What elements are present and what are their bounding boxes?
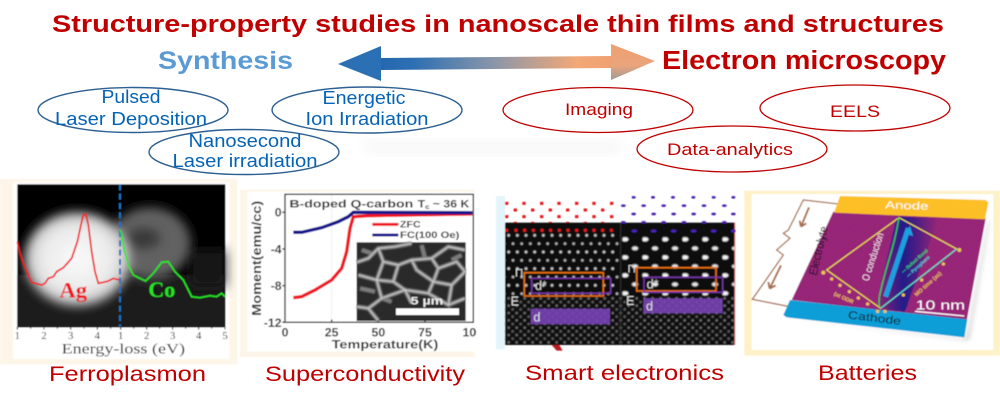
magnetization chart xyxy=(249,194,476,352)
energy axis: 4 xyxy=(95,331,101,342)
chart title: B-doped Q-carbon xyxy=(289,198,414,210)
FC curve xyxy=(293,212,472,232)
ellipse: imaging: Imaging xyxy=(565,101,633,119)
ellipse: EELS: EELS xyxy=(830,103,880,121)
label: Co: Co xyxy=(148,277,175,302)
caption: smart electronics: Smart electronics xyxy=(525,361,724,385)
x axis labels xyxy=(282,325,476,339)
caption: superconductivity: Superconductivity xyxy=(265,362,465,386)
red atom positions xyxy=(505,203,614,223)
energy axis: 1 xyxy=(15,331,20,342)
energy axis: 4 xyxy=(196,331,202,342)
ellipse: energetic ion irradiation xyxy=(272,87,462,133)
left film annotations: E xyxy=(511,294,519,308)
panel: synthesis methods xyxy=(38,87,462,174)
legend xyxy=(372,219,459,240)
anode: Anode xyxy=(885,199,929,213)
ellipse: pulsed laser deposition xyxy=(38,87,228,132)
ellipse: data-analytics: Data-analytics xyxy=(667,141,793,159)
energy axis: 5 xyxy=(222,331,228,342)
ellipse: EELS xyxy=(760,85,950,131)
y axis labels: -12 xyxy=(264,316,282,330)
x axis labels: 50 xyxy=(371,325,385,339)
right film annotations: E xyxy=(626,294,634,308)
panel: batteries xyxy=(744,191,1000,356)
electrolyte crystal xyxy=(792,212,986,321)
energy axis: 3 xyxy=(170,331,175,342)
ellipse: imaging xyxy=(503,88,693,132)
heading: electron microscopy: Electron microscopy xyxy=(662,47,947,75)
x axis title: Temperature(K) xyxy=(332,338,438,352)
y axis labels: -8 xyxy=(271,279,282,293)
legend labels xyxy=(832,248,943,306)
heading: synthesis: Synthesis xyxy=(158,47,293,75)
Co spectrum xyxy=(121,230,225,298)
x axis labels: 10 xyxy=(462,325,476,339)
energy axis: 2 xyxy=(41,331,47,342)
right film annotations: d* xyxy=(647,278,659,292)
title: Structure-property studies in nanoscale thin films and structures xyxy=(52,11,944,38)
caption: ferroplasmon: Ferroplasmon xyxy=(49,362,206,386)
panel: ferroplasmon xyxy=(0,179,237,364)
dashed divider xyxy=(117,184,123,327)
x axis labels: 75 xyxy=(418,325,432,339)
ellipse: pulsed laser deposition: Laser Deposition xyxy=(55,109,207,129)
y axis title: Moment(emu/cc) xyxy=(249,201,264,316)
axis tick dots xyxy=(821,248,961,313)
legend labels: — Pyrophore xyxy=(906,255,931,278)
label: O conduction: O conduction xyxy=(861,231,887,283)
left film annotations: d* xyxy=(535,279,547,293)
shadow xyxy=(785,221,990,341)
diagram diamond xyxy=(827,218,957,308)
scale bar xyxy=(396,308,459,315)
external circuit xyxy=(752,200,838,307)
y axis labels: 0 xyxy=(275,206,282,220)
right film annotations xyxy=(626,263,723,314)
left film annotations: d xyxy=(533,310,540,324)
energy axis: Energy-loss (eV) xyxy=(62,341,185,357)
cathode: Cathode xyxy=(847,309,902,328)
panel: smart electronics xyxy=(496,196,736,351)
red overlay atoms xyxy=(505,229,613,232)
energy axis: 2 xyxy=(144,331,149,342)
blue atom positions xyxy=(621,196,736,233)
y axis labels: -4 xyxy=(271,242,282,256)
legend labels: (at ODR xyxy=(832,291,854,306)
right film annotations: d xyxy=(646,300,653,314)
legend: FC(100 Oe) xyxy=(400,230,459,240)
ZFC curve xyxy=(293,214,472,298)
energy axis: 3 xyxy=(68,331,73,342)
ellipse: nanosecond laser irradiation xyxy=(149,130,339,174)
EELS image xyxy=(17,184,225,327)
energy axis xyxy=(15,327,228,357)
ellipse: energetic ion irradiation: Energetic xyxy=(322,88,406,108)
energy axis: 1 xyxy=(118,331,123,342)
x axis labels: 25 xyxy=(325,325,339,339)
arrow: double-headed synthesis to microscopy xyxy=(338,44,655,81)
y axis labels xyxy=(264,206,282,330)
ellipse: nanosecond laser irradiation: Laser irradiation xyxy=(172,151,318,171)
label: electrolyte: Electrolyte xyxy=(806,225,831,277)
panel: microscopy methods xyxy=(503,85,950,172)
legend: ZFC xyxy=(400,219,421,229)
caption: batteries: Batteries xyxy=(818,361,917,385)
red fragment xyxy=(552,345,563,351)
legend labels: MO time (as) xyxy=(914,271,943,298)
left film annotations: Π xyxy=(515,268,523,280)
ellipse: data-analytics xyxy=(637,126,827,172)
cathode xyxy=(783,300,967,337)
ellipse: pulsed laser deposition: Pulsed xyxy=(102,87,160,107)
SEM inset xyxy=(357,242,466,321)
anode xyxy=(834,196,988,219)
magnetization chart: T꜀ ~ 36 K xyxy=(418,198,469,210)
scale bar 10 nm: 10 nm xyxy=(916,298,965,312)
panel: superconductivity xyxy=(240,190,476,357)
scale label: 5 µm xyxy=(411,295,444,307)
faint shadow smudge xyxy=(365,142,620,152)
left film annotations xyxy=(511,268,611,324)
label: Ag: Ag xyxy=(59,278,88,303)
ellipse: energetic ion irradiation: Ion Irradiation xyxy=(306,109,428,129)
x axis labels: 0 xyxy=(282,325,289,339)
Ag spectrum xyxy=(17,214,119,285)
ellipse: nanosecond laser irradiation: Nanosecond xyxy=(188,131,302,151)
right film annotations: Π xyxy=(628,263,636,275)
atomic resolution image xyxy=(505,223,735,345)
legend labels: — Defect Band xyxy=(901,248,929,274)
scale bar 10 nm xyxy=(915,298,965,316)
